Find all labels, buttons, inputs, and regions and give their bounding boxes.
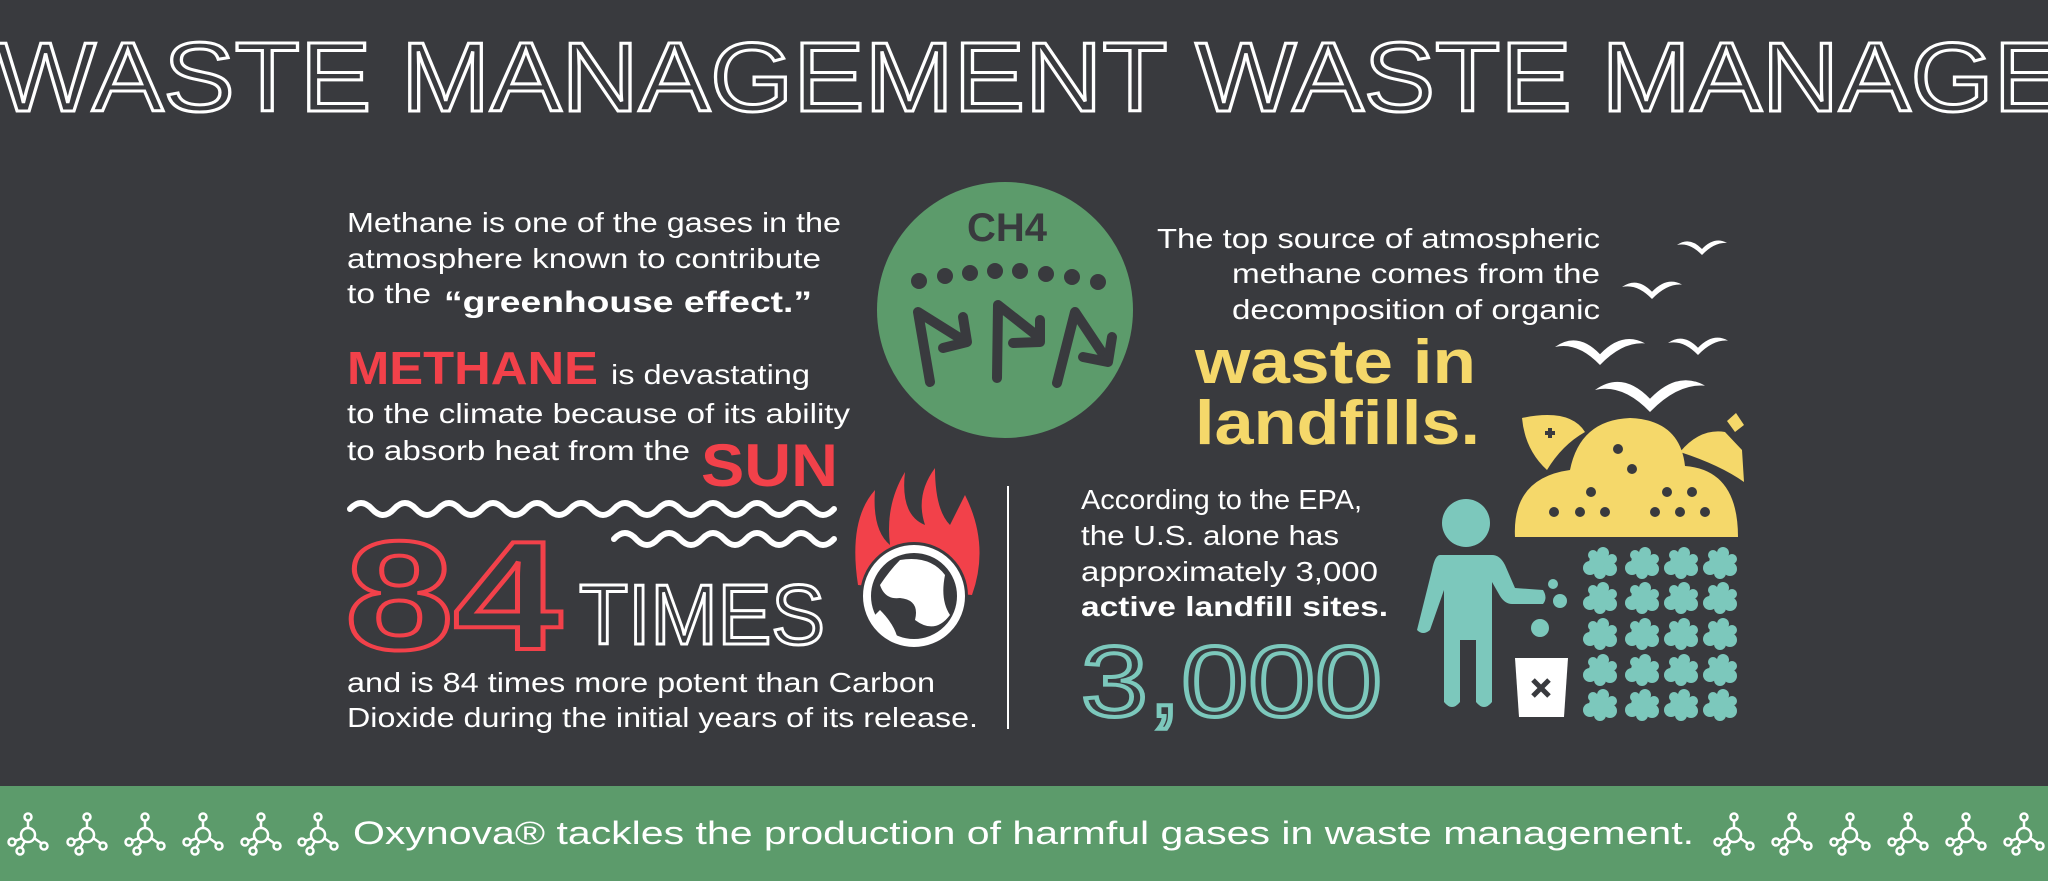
title: outline banner text: WASTE MANAGEMENT WASTE MANAGE [0, 22, 2048, 132]
text block: methane intro: Methane is one of the gases in the [347, 207, 841, 238]
text block: EPA: According to the EPA, [1081, 484, 1362, 515]
waves [350, 503, 834, 545]
circle: CH4 molecule icon [877, 182, 1133, 438]
icon: person throwing trash [1417, 499, 1567, 707]
text block: potency: Dioxide during the initial years of its release. [347, 702, 978, 733]
footer text: Oxynova® tackles the production of harmful gases in waste management. [353, 815, 1694, 851]
text block: top source: The top source of atmospheric [1157, 223, 1600, 254]
text block: methane devastating [347, 342, 850, 499]
text block: EPA: approximately 3,000 [1081, 556, 1378, 587]
text block: top source [1157, 223, 1600, 325]
heading: waste in landfills: waste in [1194, 328, 1476, 397]
text block: EPA: the U.S. alone has [1081, 520, 1339, 551]
text block: potency [347, 667, 978, 733]
text block: potency: and is 84 times more potent than Carbon [347, 667, 935, 698]
text block: EPA: active landfill sites. [1081, 591, 1388, 622]
divider [1007, 486, 1009, 729]
TIMES outline: TIMES [579, 568, 825, 663]
icon: landfill pile [1515, 413, 1744, 537]
text block: methane devastating: SUN [701, 432, 838, 499]
text block: top source: decomposition of organic [1232, 294, 1600, 325]
big number 84: 84 [345, 509, 562, 682]
text block: methane intro: atmosphere known to contribute [347, 243, 821, 274]
text block: methane devastating: is devastating [611, 359, 810, 390]
text block: methane intro [347, 207, 841, 319]
heading: waste in landfills: landfills. [1195, 389, 1480, 458]
birds [1555, 241, 1728, 412]
text block: methane devastating: METHANE [347, 342, 598, 394]
circle: CH4 molecule icon: CH4 [967, 206, 1048, 250]
icon: teal waste grid [1583, 547, 1737, 721]
text block: methane intro: to the [347, 278, 431, 309]
heading: waste in landfills [1194, 328, 1480, 458]
text block: methane intro: “greenhouse effect.” [444, 286, 812, 319]
big number 3,000: 3,000 [1081, 626, 1382, 738]
text block: EPA [1081, 484, 1388, 622]
footer band [0, 786, 2048, 881]
icon: trash bin [1515, 658, 1568, 717]
text block: top source: methane comes from the [1232, 258, 1600, 289]
icon: burning globe [855, 468, 980, 650]
icons: molecules left [8, 814, 338, 854]
text block: methane devastating: to the climate because of its ability [347, 398, 850, 429]
icons: molecules right [1714, 814, 2044, 854]
text block: methane devastating: to absorb heat from the [347, 435, 690, 466]
